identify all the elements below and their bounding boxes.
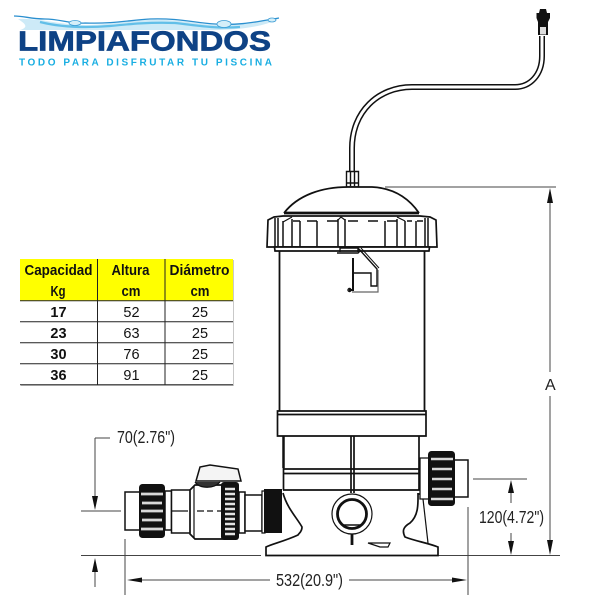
flexible tube xyxy=(346,9,550,187)
table headers: cm xyxy=(190,284,210,300)
table headers: Diámetro xyxy=(170,263,230,279)
table rows: 76 xyxy=(123,347,140,363)
table headers: cm xyxy=(122,284,140,300)
table rows: 25 xyxy=(192,368,208,384)
table rows: 63 xyxy=(123,326,140,342)
tube top fitting xyxy=(536,9,550,35)
dome lid xyxy=(284,187,419,213)
water wave xyxy=(14,16,279,30)
table rows: 23 xyxy=(50,326,67,342)
left union nut and pipe xyxy=(125,484,190,538)
tube bottom fitting xyxy=(346,172,358,187)
dimension label: 532: 532(20.9") xyxy=(276,570,343,590)
ball valve xyxy=(171,465,282,540)
table header background xyxy=(20,259,233,300)
right union fitting xyxy=(420,451,468,506)
table headers xyxy=(24,263,230,300)
center port xyxy=(332,494,372,545)
dimension lines xyxy=(81,187,560,595)
table rows: 25 xyxy=(192,326,208,342)
table headers: Capacidad xyxy=(24,263,92,279)
sight gauge bracket xyxy=(337,248,379,292)
table headers: Altura xyxy=(112,263,150,279)
brand name: LIMPIAFONDOS xyxy=(18,26,271,56)
base mark xyxy=(368,543,390,547)
lower band xyxy=(278,411,426,436)
table: capacity, height and diameter xyxy=(20,259,234,386)
table rows: 91 xyxy=(123,368,140,384)
table rows: 17 xyxy=(50,305,67,321)
cage ribs xyxy=(283,436,421,494)
table rows: 36 xyxy=(50,368,67,384)
base foot xyxy=(266,493,438,556)
tagline: TODO PARA DISFRUTAR TU PISCINA xyxy=(19,58,272,68)
table rows: 25 xyxy=(192,347,208,363)
table rows: 52 xyxy=(123,305,140,321)
table rows xyxy=(50,305,208,384)
valve union ring xyxy=(221,482,239,540)
logo xyxy=(14,16,279,68)
dimension label: 70: 70(2.76") xyxy=(117,427,175,447)
clamp ring xyxy=(267,216,437,251)
valve center line xyxy=(171,510,222,512)
cylinder xyxy=(280,250,424,411)
dimension label: 120: 120(4.72") xyxy=(479,507,544,527)
valve handle xyxy=(196,465,241,481)
dimension arrows xyxy=(92,188,553,582)
table rows: 25 xyxy=(192,305,208,321)
dimension label: A: A xyxy=(545,377,556,394)
inlet union xyxy=(262,491,265,533)
filter body xyxy=(266,187,438,556)
table shadow xyxy=(21,260,234,386)
table headers: Kg xyxy=(50,284,66,300)
table body background xyxy=(20,300,233,384)
table rows: 30 xyxy=(50,347,67,363)
